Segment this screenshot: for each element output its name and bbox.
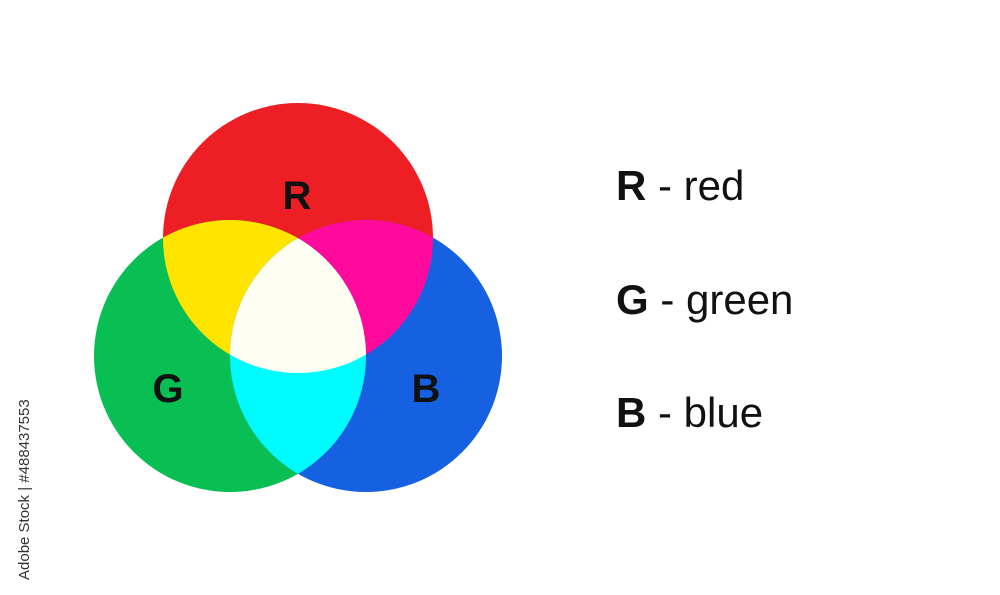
overlap: white center [230, 238, 366, 373]
overlap: cyan [230, 238, 366, 474]
circle: red [163, 103, 433, 373]
overlap: magenta [230, 220, 433, 354]
label: G: G [152, 367, 184, 411]
venn diagram: RGB additive colour circles [18, 103, 502, 580]
legend: B blue: B - blue [616, 389, 763, 436]
legend: G green: G - green [616, 276, 793, 323]
circle: blue [230, 220, 502, 492]
circle: green [94, 220, 366, 492]
label: B: B [412, 367, 440, 411]
legend: R red: R - red [616, 162, 744, 209]
overlap: yellow [163, 220, 298, 354]
label: R: R [283, 174, 312, 218]
watermark id text: Adobe Stock | #488437553 [16, 399, 33, 580]
